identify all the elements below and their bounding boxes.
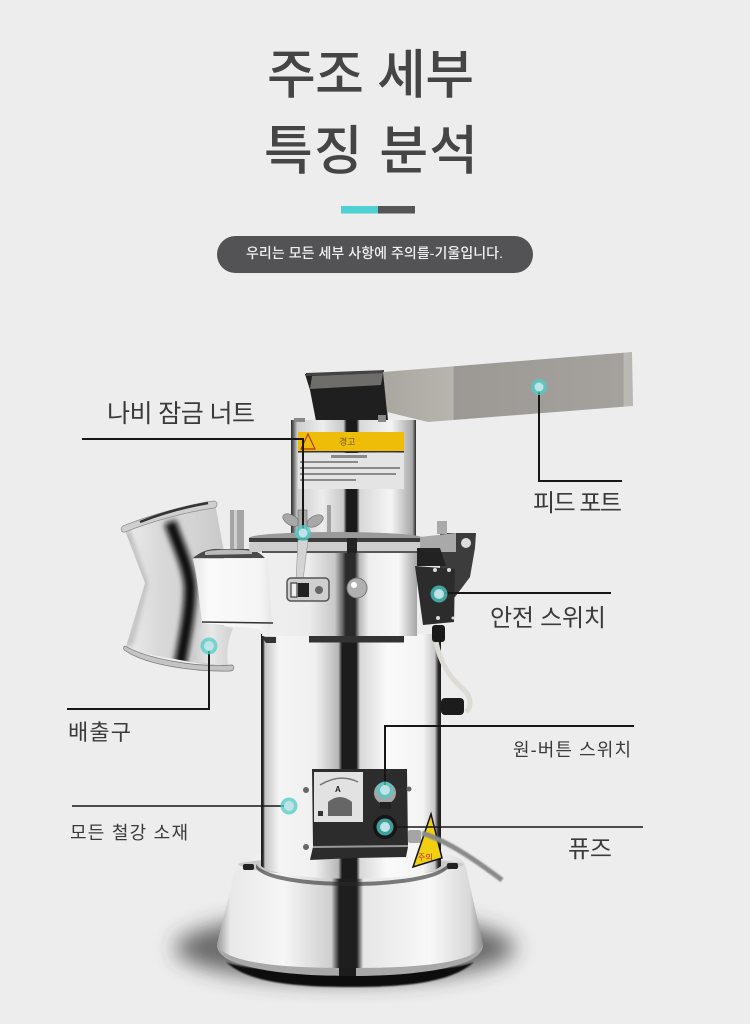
lower cylinder bbox=[261, 634, 441, 879]
machine illustration bbox=[115, 352, 633, 987]
title: 특징 분석 bbox=[264, 122, 478, 181]
feed chute and hopper bbox=[305, 352, 633, 422]
upper rim bbox=[121, 501, 217, 532]
discharge tube bbox=[120, 500, 224, 666]
grinding chamber bbox=[262, 552, 417, 636]
lower rim of discharge tube bbox=[124, 646, 234, 671]
warning label: 경고 bbox=[339, 436, 356, 447]
label: one-button switch: 원-버튼 스위치 bbox=[513, 740, 631, 760]
warning triangle sticker: 주의 bbox=[418, 852, 433, 862]
infographic canvas bbox=[67, 48, 643, 999]
white outlet connector bbox=[190, 549, 273, 667]
accent bar bbox=[341, 206, 415, 214]
safety switch bracket bbox=[415, 521, 476, 642]
marker dots bbox=[200, 379, 547, 836]
subtitle pill: 우리는 모든 세부 사항에 주의를-기울입니다. bbox=[246, 245, 503, 261]
ammeter: A bbox=[335, 785, 341, 794]
power cord bbox=[408, 830, 502, 880]
clamp and dome bolt bbox=[287, 540, 367, 601]
leader lines bbox=[67, 387, 643, 827]
upper cylinder bbox=[291, 415, 416, 538]
base bbox=[217, 854, 483, 987]
label: safety switch: 안전 스위치 bbox=[490, 605, 606, 632]
warning triangle sticker bbox=[413, 814, 442, 867]
floor shadow bbox=[175, 914, 515, 982]
fuse knob bbox=[373, 815, 397, 839]
label: all steel material: 모든 철강 소재 bbox=[70, 823, 188, 843]
label: fuse: 퓨즈 bbox=[568, 836, 612, 863]
label: wing lock nut: 나비 잠금 너트 bbox=[107, 400, 255, 428]
wing nut bbox=[281, 510, 325, 534]
title bbox=[264, 46, 478, 181]
pin bbox=[230, 510, 244, 554]
toggle bbox=[374, 782, 396, 809]
flange bbox=[249, 532, 425, 643]
power cable and gland bbox=[436, 642, 470, 715]
label: feed port: 피드 포트 bbox=[533, 490, 622, 517]
label: discharge port: 배출구 bbox=[68, 720, 131, 745]
warning label bbox=[298, 432, 404, 489]
title: 주조 세부 bbox=[267, 46, 474, 105]
subtitle pill bbox=[217, 236, 533, 273]
control panel bbox=[303, 769, 412, 860]
